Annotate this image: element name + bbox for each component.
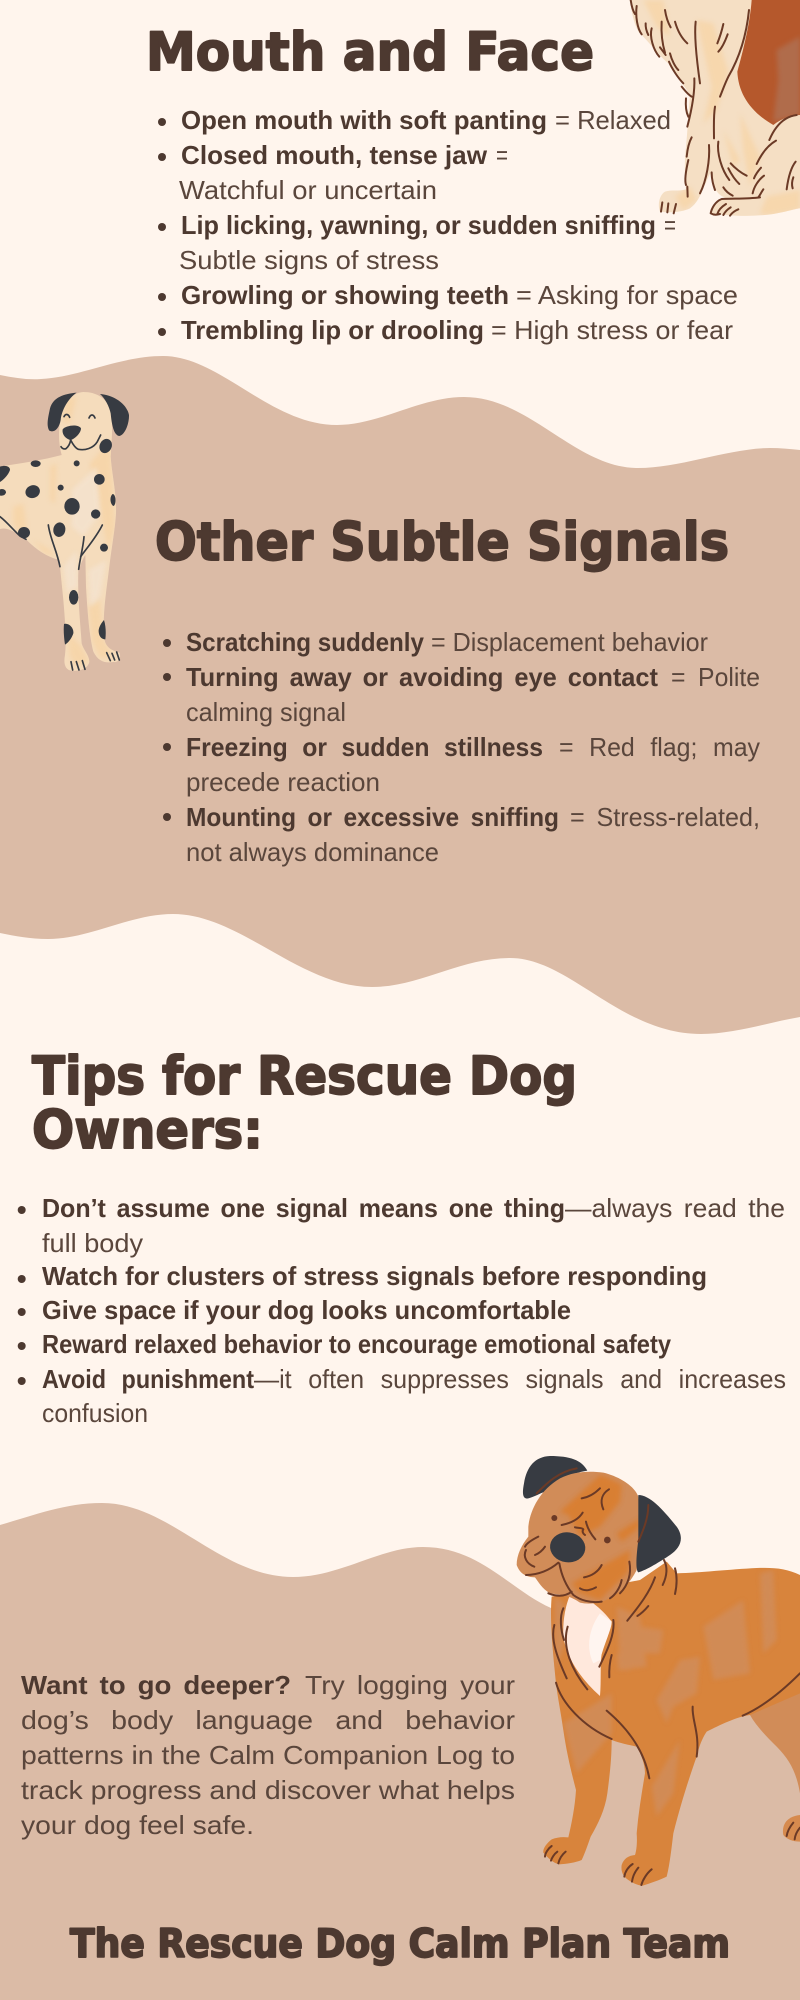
list: tips for owners: —it often suppresses signals and increases: [254, 1364, 786, 1394]
callout: want to go deeper: [21, 1670, 515, 1840]
list: tips for owners: confusion: [42, 1398, 148, 1428]
list: mouth and face signals: Open mouth with soft panting: [181, 105, 547, 135]
list: other subtle signals: Turning away or avoiding eye contact: [186, 662, 658, 692]
footer: team signature: The Rescue Dog Calm Plan Team: [70, 1922, 730, 1967]
illustration: dalmatian dog, left: [0, 392, 129, 671]
list: other subtle signals: [163, 627, 760, 867]
list: mouth and face signals: =: [496, 140, 508, 170]
callout: want to go deeper: Try logging your: [305, 1670, 515, 1700]
list: mouth and face signals: Watchful or uncertain: [179, 175, 437, 205]
list: mouth and face signals: = High stress or fear: [491, 315, 733, 345]
heading: Tips for Rescue Dog Owners: Tips for Rescue Dog: [32, 1046, 577, 1107]
wave panel: closing call to action background: [0, 1503, 800, 2000]
title: Mouth and Face: Mouth and Face: [146, 22, 594, 83]
callout: want to go deeper: track progress and discover what helps: [21, 1775, 515, 1805]
list: mouth and face signals: Lip licking, yawning, or sudden sniffing: [181, 210, 656, 240]
illustration: orange dog tilting head, bottom right: [517, 1456, 800, 1886]
list: mouth and face signals: = Asking for space: [516, 280, 738, 310]
list: mouth and face signals: Closed mouth, tense jaw: [181, 140, 488, 170]
list: mouth and face signals: [158, 105, 738, 345]
illustration detail: white chest patch: [563, 1595, 612, 1696]
list: tips for owners: —always read the: [565, 1193, 785, 1223]
list: mouth and face signals: = Relaxed: [555, 105, 671, 135]
callout: want to go deeper: patterns in the Calm Companion Log to: [21, 1740, 515, 1770]
list: tips for owners: Give space if your dog looks uncomfortable: [42, 1295, 571, 1325]
list: other subtle signals: Scratching suddenly: [186, 627, 424, 657]
heading: Tips for Rescue Dog Owners: Owners:: [32, 1100, 263, 1161]
list: other subtle signals: = Red flag; may: [559, 732, 760, 762]
list: tips for owners: Avoid punishment: [42, 1364, 254, 1394]
list: other subtle signals: Freezing or sudden stillness: [186, 732, 543, 762]
callout: want to go deeper: your dog feel safe.: [21, 1810, 254, 1840]
list: tips for owners: Reward relaxed behavior to encourage emotional safety: [42, 1329, 671, 1359]
list: other subtle signals: calming signal: [186, 697, 346, 727]
list: mouth and face signals: Trembling lip or drooling: [181, 315, 484, 345]
list: other subtle signals: not always dominance: [186, 837, 439, 867]
list: tips for owners: Don’t assume one signal means one thing: [42, 1193, 565, 1223]
heading: Other Subtle Signals: Other Subtle Signals: [155, 512, 729, 573]
wave panel: other subtle signals background: [0, 356, 800, 1034]
list: other subtle signals: = Stress-related,: [570, 802, 760, 832]
list: mouth and face signals: =: [664, 210, 676, 240]
list: other subtle signals: = Polite: [671, 662, 760, 692]
list: other subtle signals: precede reaction: [186, 767, 380, 797]
list: other subtle signals: Mounting or excessive sniffing: [186, 802, 559, 832]
illustration: cream and rust dog, top right: [630, 0, 800, 216]
list: mouth and face signals: Growling or showing teeth: [181, 280, 509, 310]
callout: want to go deeper: dog’s body language and behavior: [21, 1705, 515, 1735]
list: other subtle signals: = Displacement behavior: [431, 627, 708, 657]
callout: want to go deeper: Want to go deeper?: [21, 1670, 291, 1700]
list: mouth and face signals: Subtle signs of stress: [179, 245, 439, 275]
heading: Tips for Rescue Dog Owners: [32, 1046, 577, 1161]
list: tips for owners: full body: [42, 1228, 143, 1258]
list: tips for owners: Watch for clusters of stress signals before responding: [42, 1261, 707, 1291]
list: tips for owners: [18, 1193, 786, 1428]
